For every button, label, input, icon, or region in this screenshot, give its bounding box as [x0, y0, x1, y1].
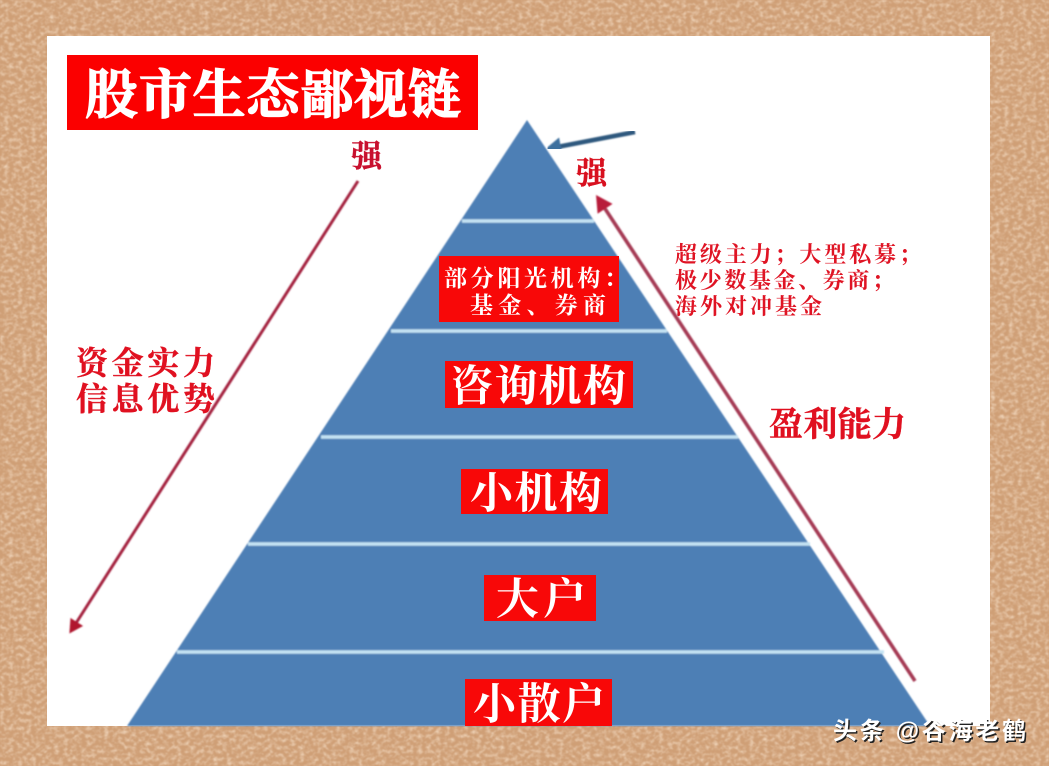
pyramid body: [127, 120, 930, 726]
tier label: sunshine institutions: 部分阳光机构：: [444, 266, 627, 291]
title: 股市生态鄙视链: [85, 67, 461, 125]
tier dividers: [177, 221, 884, 652]
tier label: large investors: 大户: [496, 576, 586, 624]
arrow: right profitability: [598, 198, 915, 681]
text: top tier description: [675, 242, 921, 319]
tier label: sunshine institutions: [439, 256, 627, 322]
tier label: advisory institutions: 咨询机构: [450, 363, 626, 411]
text: profitability: 盈利能力: [769, 406, 906, 444]
tier label: retail investors: 小散户: [473, 681, 605, 729]
text: top tier description: 超级主力；大型私募；: [675, 242, 921, 267]
label: strong left: 强: [351, 139, 385, 174]
arrow: apex pointer: [552, 132, 635, 148]
text: capital and information: [76, 345, 215, 417]
text: capital and information: 信息优势: [76, 381, 215, 417]
pyramid: [127, 120, 930, 726]
text: top tier description: 海外对冲基金: [675, 294, 822, 319]
tier label: sunshine institutions: 基金、券商: [470, 293, 606, 318]
arrow: left capital strength: [71, 181, 358, 631]
watermark: 头条 @谷海老鹤: [833, 718, 1026, 745]
label: strong right: 强: [576, 156, 610, 191]
tier label: small institutions: 小机构: [470, 470, 602, 518]
text: capital and information: 资金实力: [76, 345, 215, 381]
watermark: 头条 @谷海老鹤: [834, 720, 1028, 746]
text: top tier description: 极少数基金、券商；: [675, 268, 894, 293]
